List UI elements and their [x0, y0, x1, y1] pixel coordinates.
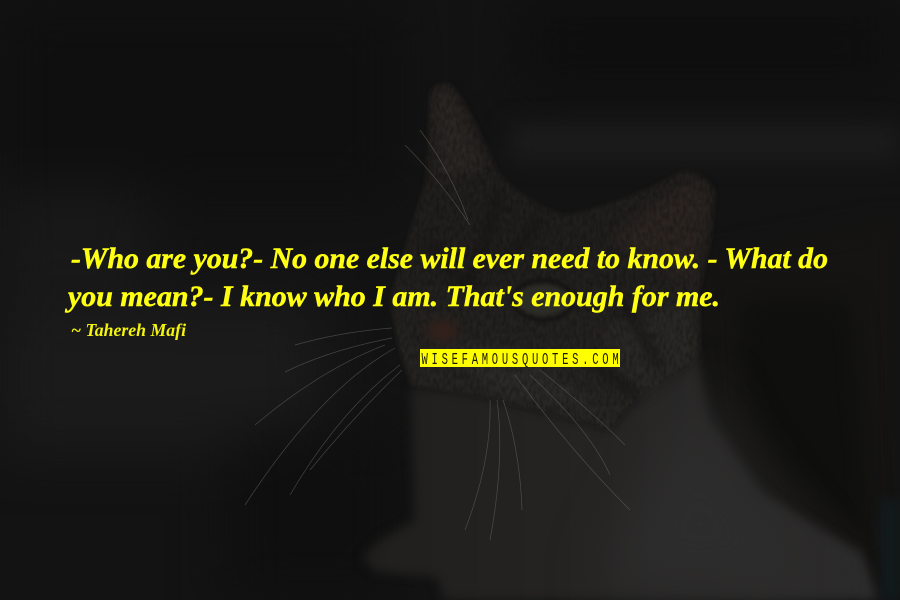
ear interiors — [430, 91, 708, 410]
dark body at right — [700, 220, 900, 600]
author attribution: ~ Tahereh Mafi — [71, 320, 186, 340]
white chest — [363, 353, 878, 600]
head fur texture — [390, 83, 715, 430]
quote line 1: -Who are you?- No one else will ever need to know. - What do — [71, 242, 828, 275]
watermark badge: WISEFAMOUSQUOTES.COM — [422, 351, 619, 370]
eye and nose — [427, 280, 573, 342]
quote line 2: you mean?- I know who I am. That's enough for me. — [65, 280, 720, 313]
whiskers — [245, 130, 630, 540]
head stripes — [430, 190, 660, 395]
cat head — [390, 83, 715, 430]
